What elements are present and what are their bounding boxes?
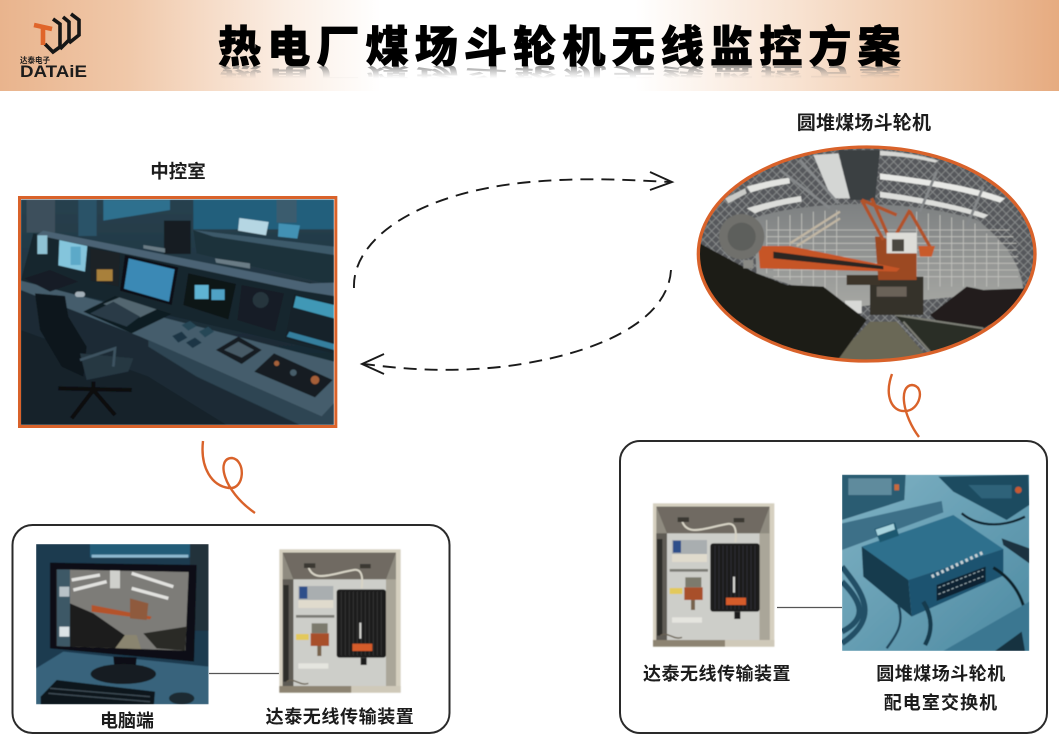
photo: control room (19, 197, 336, 426)
logo mark (34, 14, 79, 52)
title reflection: 热电厂煤场斗轮机无线监控方案 (219, 64, 908, 81)
header banner (0, 0, 1059, 91)
arrow: control room to machine (354, 179, 670, 288)
left coal pile (697, 242, 867, 362)
squiggle connector: control room (203, 441, 255, 513)
skylights (813, 153, 850, 198)
operator cab (887, 233, 917, 253)
arrowhead: top (650, 172, 672, 190)
logo Chinese name: 达泰电子 (20, 55, 50, 65)
keyboards and controls (24, 270, 78, 292)
right coal pile (930, 286, 1024, 328)
mast (875, 237, 917, 280)
heading: bucket wheel machine: 圆堆煤场斗轮机 (797, 112, 931, 134)
rear of console (21, 234, 334, 336)
dome central dark panel (838, 150, 880, 200)
floor (839, 321, 924, 360)
logo (20, 14, 87, 81)
chair (35, 293, 133, 418)
banner background (0, 0, 1059, 91)
label: wireless transmission device: 达泰无线传输装置 (266, 706, 414, 727)
photo: computer (36, 544, 209, 704)
panel: control room equipment (12, 525, 450, 733)
bucket wheel (719, 214, 764, 259)
conveyor (896, 316, 982, 352)
photo: bucket wheel machine in dome (697, 145, 1037, 363)
wall (753, 204, 1023, 307)
arrow: machine to control room (364, 270, 671, 370)
desk top (21, 281, 334, 417)
boom (758, 246, 900, 272)
label: computer: 电脑端 (100, 711, 154, 731)
label: switch line 1: 圆堆煤场斗轮机 (876, 664, 1006, 684)
photo: wireless transmission device (653, 503, 774, 647)
panel frame (12, 525, 450, 733)
photo: wireless transmission device (279, 549, 401, 693)
label: switch line 2: 配电室交换机 (884, 692, 998, 713)
floor (21, 330, 227, 425)
squiggle connector: bucket wheel machine (889, 374, 920, 437)
label: wireless transmission device: 达泰无线传输装置 (643, 663, 791, 684)
heading: control room: 中控室 (150, 161, 206, 182)
photo: network switch (842, 475, 1029, 651)
logo wordmark: DATAiE (20, 63, 87, 81)
switch body (862, 515, 1003, 580)
monitors (58, 240, 87, 272)
panel: machine-side equipment (620, 441, 1047, 733)
desk front (21, 290, 298, 425)
title: 热电厂煤场斗轮机无线监控方案 (218, 23, 907, 72)
arrowhead: bottom (362, 354, 384, 374)
machine base (870, 277, 923, 315)
panel frame (620, 441, 1047, 733)
connector line (209, 672, 279, 674)
connector line (777, 606, 842, 608)
